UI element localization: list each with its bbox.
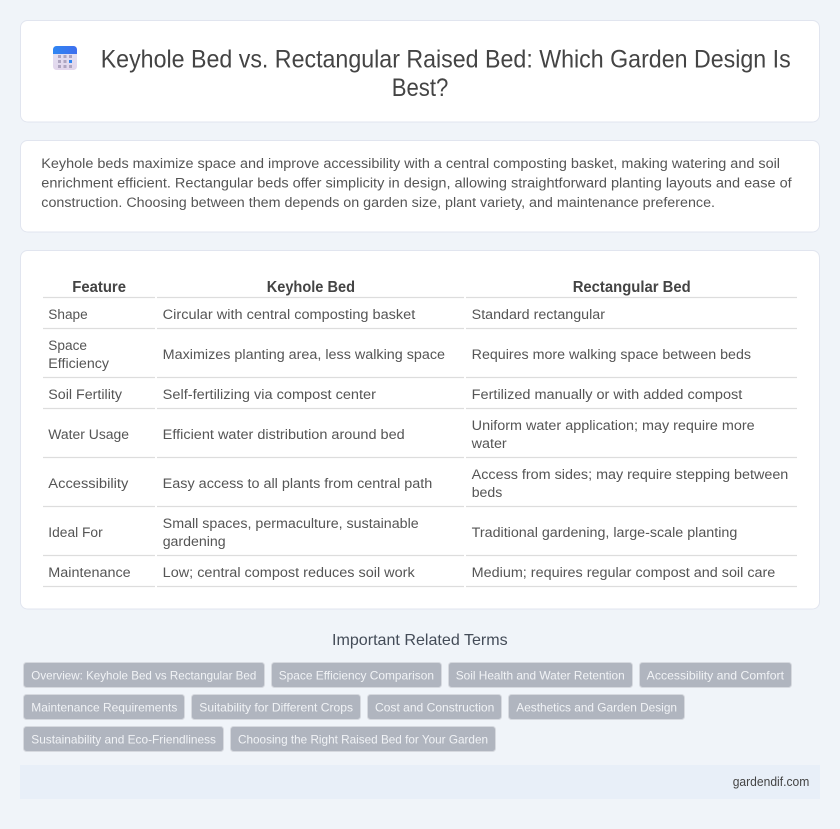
heading: important related terms: Important Related Terms: [332, 632, 508, 649]
tag: aesthetics: [508, 694, 684, 720]
row: shape: Circular with central composting basket: [163, 307, 415, 323]
panel: comparison table: [20, 250, 820, 609]
row: accessibility: Access from sides; may require stepping between: [472, 467, 788, 483]
row: soil fertility: Fertilized manually or with added compost: [472, 387, 742, 403]
row: accessibility: beds: [472, 485, 502, 501]
row: water usage: [48, 418, 755, 452]
tag: suitability: [192, 694, 360, 720]
row: ideal for: [48, 516, 737, 550]
row: space efficiency: [48, 338, 751, 372]
tag: accessibility: [640, 662, 792, 688]
row: water usage: Uniform water application; may require more: [472, 418, 755, 434]
row: space efficiency: Efficiency: [48, 356, 110, 372]
tag: overview: [24, 662, 264, 688]
row: water usage: water: [471, 436, 507, 452]
row: maintenance: [48, 565, 775, 581]
row: space efficiency: Space: [48, 338, 87, 354]
row: ideal for: Small spaces, permaculture, sustainable: [163, 516, 419, 532]
title: [101, 46, 791, 102]
row: maintenance: Medium; requires regular compost and soil care: [472, 565, 775, 581]
row: ideal for: Traditional gardening, large-scale planting: [472, 525, 737, 541]
row: accessibility: Accessibility: [48, 476, 129, 492]
tag: overview: Overview: Keyhole Bed vs Rectangular Bed: [31, 668, 256, 682]
row: soil fertility: Soil Fertility: [48, 387, 123, 403]
row: soil fertility: [48, 387, 742, 403]
tag: space efficiency comparison: Space Efficiency Comparison: [279, 668, 434, 682]
tag: space efficiency comparison: [272, 662, 442, 688]
row: space efficiency: Maximizes planting area, less walking space: [163, 347, 445, 363]
panel: header: [20, 20, 820, 122]
table header row: Keyhole Bed: [267, 279, 355, 296]
row: soil fertility: Self-fertilizing via compost center: [163, 387, 376, 403]
table header row: Feature: [72, 279, 126, 296]
table header row: [72, 279, 691, 296]
row: ideal for: gardening: [163, 534, 226, 550]
summary paragraph: Keyhole beds maximize space and improve accessibility with a central composting basket, making watering and soil: [41, 156, 780, 172]
footer bar: gardendif.com: [733, 775, 809, 789]
row: accessibility: Easy access to all plants from central path: [163, 476, 432, 492]
tag: choosing: [230, 726, 496, 752]
row: shape: [48, 307, 605, 323]
tag: sustainability: Sustainability and Eco-Friendliness: [31, 732, 216, 746]
row: water usage: Water Usage: [48, 427, 129, 443]
row: shape: Standard rectangular: [472, 307, 605, 323]
tag: aesthetics: Aesthetics and Garden Design: [516, 700, 677, 714]
tag: soil health: Soil Health and Water Retention: [456, 668, 625, 682]
row: maintenance: Low; central compost reduces soil work: [163, 565, 416, 581]
tag: suitability: Suitability for Different Crops: [199, 700, 353, 714]
summary paragraph: enrichment efficient. Rectangular beds offer simplicity in design, allowing straightforward planting layouts and ease of: [41, 176, 792, 192]
row: ideal for: Ideal For: [48, 525, 103, 541]
tag: cost: Cost and Construction: [375, 700, 494, 714]
tag: soil health: [448, 662, 632, 688]
tag: maintenance: [24, 694, 184, 720]
table header row: Rectangular Bed: [573, 279, 691, 296]
tag: sustainability: [24, 726, 224, 752]
summary paragraph: [41, 156, 792, 211]
title: Best?: [392, 75, 448, 102]
row: maintenance: Maintenance: [48, 565, 131, 581]
tag: choosing: Choosing the Right Raised Bed for Your Garden: [238, 732, 488, 746]
footer bar: [20, 765, 820, 799]
row: shape: Shape: [48, 307, 88, 323]
icon: calendar: [53, 46, 77, 70]
related term tags: [24, 662, 792, 752]
tag: cost: [368, 694, 502, 720]
title: Keyhole Bed vs. Rectangular Raised Bed: Which Garden Design Is: [101, 46, 791, 73]
row: space efficiency: Requires more walking space between beds: [472, 347, 751, 363]
tag: accessibility: Accessibility and Comfort: [647, 668, 785, 682]
row: water usage: Efficient water distribution around bed: [163, 427, 405, 443]
panel: summary text: [20, 140, 820, 232]
summary paragraph: construction. Choosing between them depends on garden size, plant variety, and maintenance preference.: [41, 195, 715, 211]
row: accessibility: [48, 467, 788, 501]
tag: maintenance: Maintenance Requirements: [31, 700, 177, 714]
